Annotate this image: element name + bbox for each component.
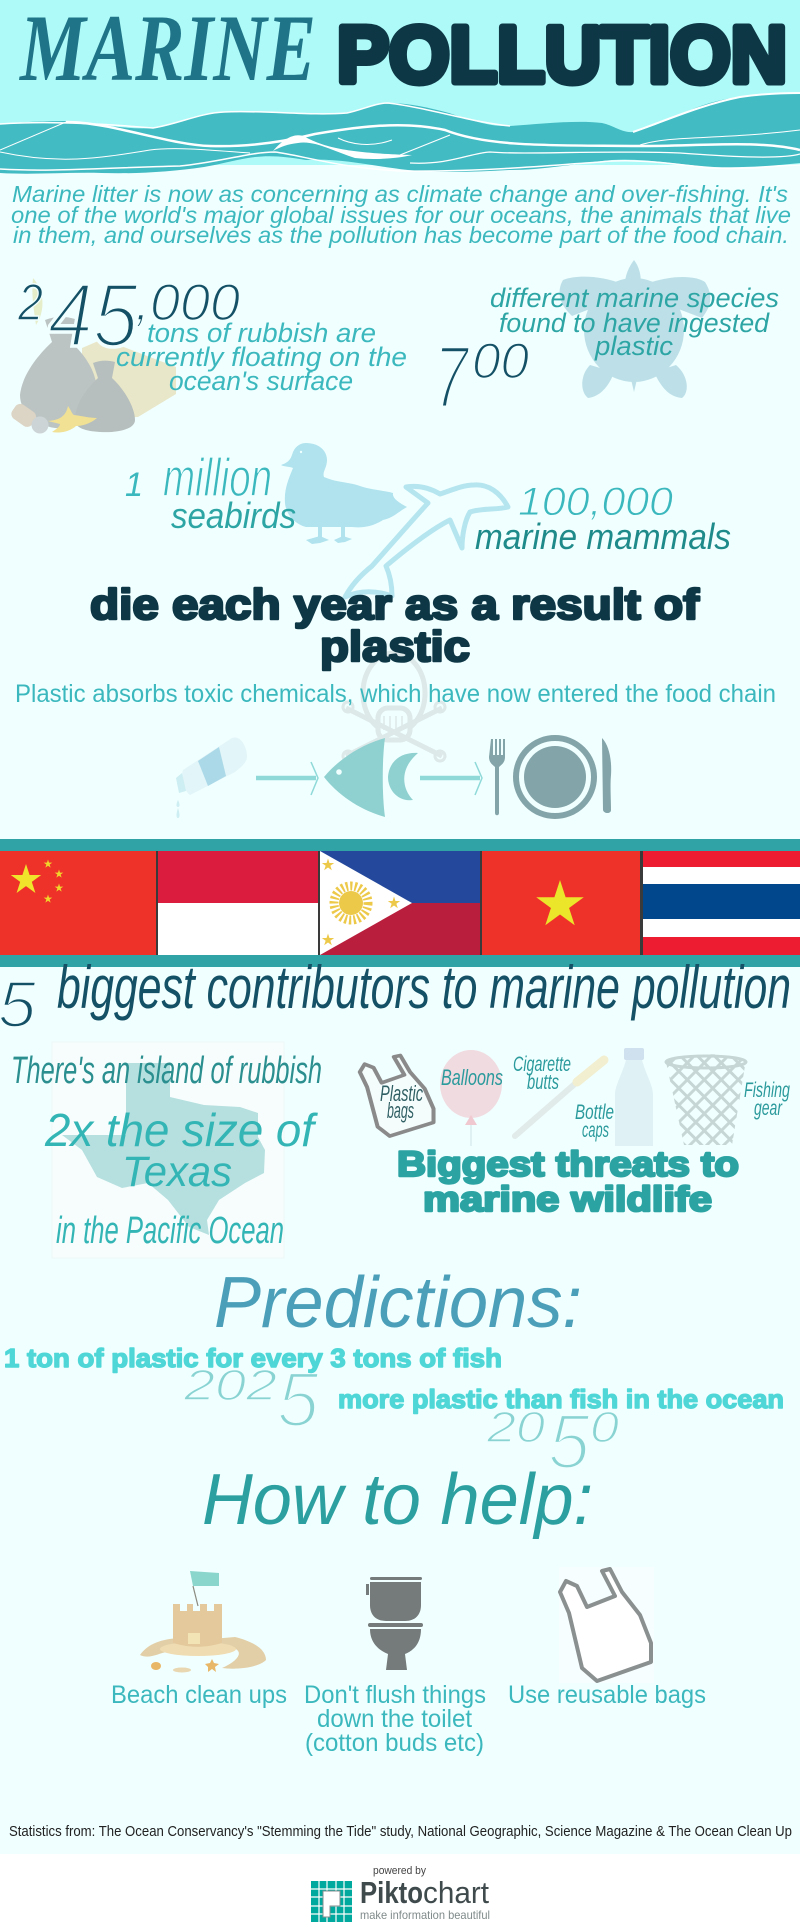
text: tons of rubbish: ocean's surface — [169, 366, 353, 396]
icon: turtle — [560, 260, 710, 398]
prediction: 2050: 0 — [590, 1403, 620, 1452]
icon: duck — [281, 443, 407, 544]
title — [18, 0, 787, 101]
waves — [0, 93, 800, 174]
text: island of rubbish: 2x the size of — [44, 1104, 318, 1156]
text: 100,000 marine mammals: marine mammals — [475, 516, 731, 557]
footer: powered by — [373, 1865, 426, 1877]
245,000 statistic: 45 — [48, 266, 139, 366]
labels: threats — [380, 1053, 790, 1142]
arrow: fish to plate — [420, 762, 482, 795]
text: 1 million seabirds — [125, 448, 296, 536]
prediction: 2025: 1 ton of plastic for every 3 tons of fish — [4, 1343, 502, 1373]
flag: China — [0, 851, 156, 955]
footer — [0, 1854, 800, 1931]
245,000 statistic: ,000 — [135, 274, 240, 332]
labels: threats: Balloons — [441, 1065, 503, 1090]
panel: Texas card — [52, 1042, 284, 1258]
heading: biggest threats: marine wildlife — [423, 1180, 712, 1219]
labels: threats: Plastic — [380, 1081, 423, 1106]
700 statistic: 7 — [434, 327, 470, 426]
flag: Indonesia — [158, 851, 318, 955]
text: don't flush — [304, 1681, 486, 1757]
labels: threats: bags — [387, 1098, 414, 1123]
intro text: in them, and ourselves as the pollution has become part of the food chain. — [13, 222, 789, 248]
prediction: 2025 — [4, 1343, 502, 1443]
icon: rubbish bags and box — [9, 278, 176, 434]
labels: threats: gear — [754, 1097, 783, 1120]
title: POLLUTION — [337, 10, 787, 99]
icon: bottle — [176, 737, 247, 818]
text: don't flush: Don't flush things — [304, 1681, 486, 1709]
icon: cigarette — [515, 1060, 604, 1136]
text: 1 million seabirds: million — [163, 448, 272, 508]
prediction: 2025: 5 — [277, 1355, 320, 1443]
icon: plastic bag — [360, 1055, 434, 1136]
text: tons of rubbish: tons of rubbish are — [147, 318, 376, 348]
text: island of rubbish: Texas — [122, 1148, 232, 1196]
labels: threats: caps — [582, 1119, 609, 1142]
text: different marine species: plastic — [594, 331, 674, 361]
icon: Piktochart logo — [311, 1881, 352, 1922]
heading: biggest threats: Biggest threats to — [397, 1145, 739, 1184]
text: island of rubbish — [11, 1050, 322, 1252]
icon: balloon — [440, 1050, 502, 1146]
icon: dolphin — [345, 485, 508, 597]
icon: toilet — [366, 1577, 423, 1670]
heading: die each year: plastic — [320, 623, 470, 671]
text: 1 million seabirds: seabirds — [171, 495, 296, 536]
icon: sandcastle — [140, 1571, 266, 1672]
text: 100,000 marine mammals: 100,000 — [518, 480, 673, 524]
text: plastic absorbs toxic chemicals: Plastic absorbs toxic chemicals, which have now entered the food chain — [15, 680, 776, 708]
prediction: 2050: more plastic than fish in the ocean — [338, 1384, 784, 1414]
icon: net basket — [666, 1054, 746, 1145]
icon: reusable bag — [559, 1567, 654, 1683]
icon: water bottle — [615, 1048, 653, 1146]
labels: threats: Bottle — [575, 1101, 614, 1124]
heading: die each year: die each year as a result of — [90, 581, 700, 629]
245,000 statistic — [17, 266, 240, 366]
icon: skull and crossbones — [343, 653, 445, 761]
icon: Texas map — [62, 1063, 265, 1235]
footer: chart — [423, 1875, 489, 1910]
footer: Pikto — [360, 1875, 423, 1910]
prediction: 2050: 5 — [548, 1397, 591, 1485]
icon: fish — [324, 738, 418, 817]
header background — [0, 0, 800, 165]
footer: make information beautiful — [360, 1908, 490, 1922]
heading: predictions: Predictions: — [214, 1263, 582, 1343]
700 statistic: 00 — [472, 333, 529, 389]
arrow: bottle to fish — [256, 762, 318, 795]
text: don't flush: down the toilet — [317, 1705, 472, 1733]
text: different marine species — [490, 283, 779, 361]
text: beach clean ups: Beach clean ups — [111, 1681, 287, 1709]
heading: how to help: How to help: — [202, 1460, 593, 1540]
text: tons of rubbish — [116, 318, 407, 396]
text: island of rubbish: There's an island of rubbish — [11, 1050, 322, 1092]
heading: biggest threats — [397, 1145, 739, 1219]
prediction: 2025: 202 — [183, 1361, 277, 1410]
text: use reusable bags: Use reusable bags — [508, 1681, 706, 1709]
text: tons of rubbish: currently floating on the — [116, 342, 407, 372]
245,000 statistic: 2 — [17, 274, 43, 332]
text: island of rubbish: in the Pacific Ocean — [56, 1210, 284, 1252]
icon: plate and cutlery — [489, 738, 611, 816]
text: 1 million seabirds: 1 — [125, 466, 143, 504]
text: different marine species: found to have ingested — [499, 308, 770, 338]
intro text — [11, 181, 791, 248]
text: different marine species: different marine species — [490, 283, 779, 313]
flag: Vietnam — [482, 851, 640, 955]
heading: die each year — [90, 581, 700, 671]
intro text: Marine litter is now as concerning as climate change and over-fishing. It's — [12, 181, 789, 207]
labels: threats: Cigarette — [513, 1053, 571, 1076]
text: 100,000 marine mammals — [475, 480, 731, 557]
text: don't flush: (cotton buds etc) — [305, 1729, 484, 1757]
flag: Philippines — [320, 851, 480, 955]
intro text: one of the world's major global issues for our oceans, the animals that live — [11, 202, 791, 228]
prediction: 2050: 20 — [486, 1403, 546, 1452]
700 statistic — [434, 327, 529, 426]
labels: threats: butts — [527, 1071, 559, 1094]
flag: Thailand — [643, 851, 800, 955]
band: flags — [0, 839, 800, 967]
prediction: 2050 — [338, 1384, 784, 1485]
